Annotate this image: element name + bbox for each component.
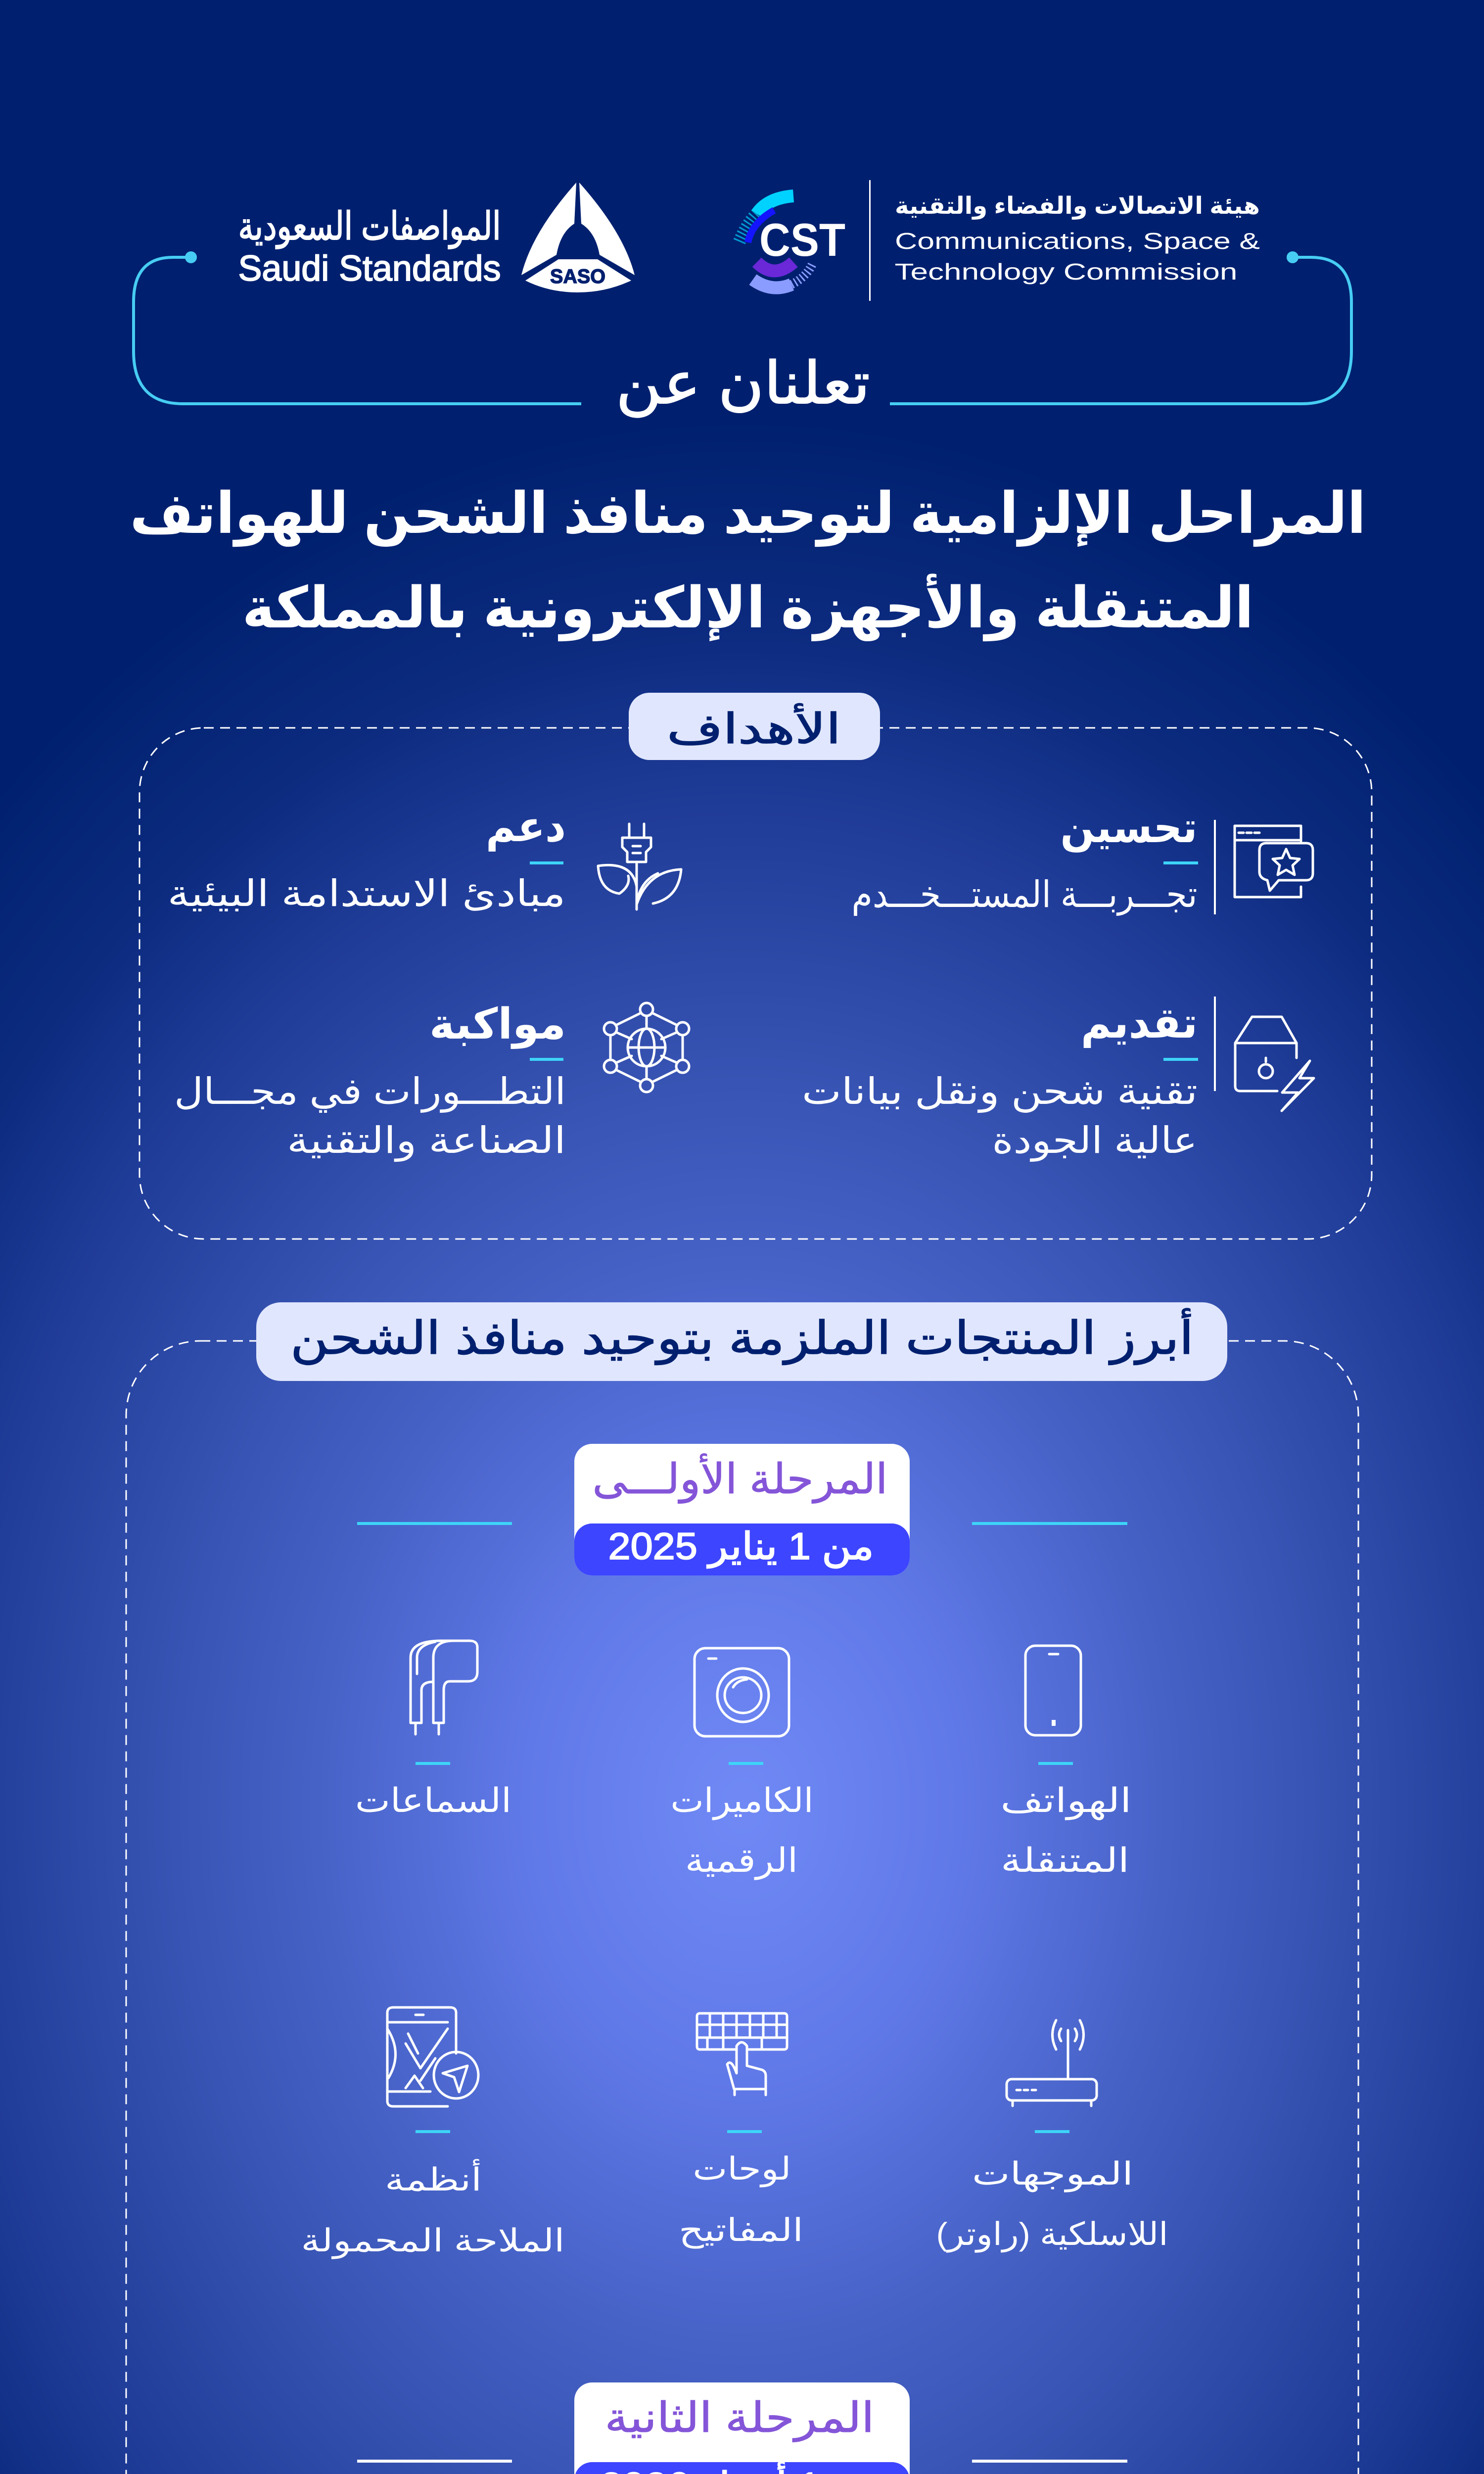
SASO name text: المواصفات السعودية xyxy=(238,204,501,249)
panel: goals xyxy=(139,693,1372,1239)
heading: products: أبرز المنتجات الملزمة بتوحيد منافذ الشحن xyxy=(290,1308,1194,1365)
subtitle: تعلنان عن xyxy=(616,351,870,418)
icon: charger with bolt xyxy=(1235,1017,1314,1111)
icon: navigation phone xyxy=(387,2007,478,2106)
goal: improve user experience: تجـــربـــة المستـــخـــدم xyxy=(852,874,1197,916)
goal: advanced charging xyxy=(802,997,1314,1162)
header frame line xyxy=(134,253,1351,404)
icon: camera xyxy=(695,1648,789,1736)
product: wireless routers: الموجهات xyxy=(972,2156,1133,2192)
product: portable navigation systems: الملاحة المحمولة xyxy=(301,2223,565,2259)
main title: المراحل الإلزامية لتوحيد منافذ الشحن للهواتف xyxy=(130,482,1366,547)
icon: router xyxy=(1007,2020,1097,2106)
phase 2 card: المرحلة الثانية xyxy=(604,2394,875,2442)
CST name text xyxy=(894,193,1260,285)
logo: CST: CST xyxy=(759,214,845,266)
icon: phone xyxy=(1025,1646,1081,1735)
goal: support sustainability: دعم xyxy=(486,803,566,852)
heading: goals xyxy=(629,693,880,760)
phase 1 card xyxy=(357,1444,1127,1575)
CST emblem xyxy=(739,196,812,288)
CST name text: Communications, Space & xyxy=(895,228,1260,254)
product: keyboards: لوحات xyxy=(693,2151,791,2188)
panel: products xyxy=(126,1302,1358,2474)
phase 1 card: المرحلة الأولـــى xyxy=(593,1453,887,1504)
CST name text: Technology Commission xyxy=(894,259,1238,285)
product: wireless routers: اللاسلكية (راوتر) xyxy=(936,2216,1168,2253)
heading: goals: الأهداف xyxy=(667,703,841,752)
goal: keeping pace with developments: الصناعة والتقنية xyxy=(287,1120,566,1162)
CST name text: هيئة الاتصالات والفضاء والتقنية xyxy=(895,193,1260,220)
main title: المتنقلة والأجهزة الإلكترونية بالمملكة xyxy=(242,573,1253,642)
main title xyxy=(130,482,1366,642)
product: earphones: السماعات xyxy=(355,1782,511,1819)
goal: keeping pace with developments: التطـــورات في مجـــال xyxy=(174,1071,566,1113)
icon: keyboard with finger xyxy=(697,2013,787,2095)
goal: improve user experience xyxy=(852,804,1313,916)
goal: advanced charging: عالية الجودة xyxy=(992,1120,1197,1162)
phase 1 card: من 1 يناير 2025 xyxy=(608,1525,874,1569)
product: earphones xyxy=(355,1641,511,1819)
product: portable navigation systems xyxy=(301,2007,565,2259)
SASO emblem xyxy=(521,183,635,292)
goal: keeping pace with developments xyxy=(174,1000,689,1162)
product: wireless routers xyxy=(936,2020,1168,2253)
product: keyboards: المفاتيح xyxy=(679,2212,803,2249)
logo: Saudi Standards xyxy=(238,183,635,292)
product: keyboards xyxy=(679,2013,803,2249)
product: mobile phones xyxy=(1000,1646,1132,1879)
SASO name text: Saudi Standards xyxy=(238,249,501,288)
goal: support sustainability xyxy=(167,803,681,914)
SASO name text xyxy=(238,204,501,288)
heading: products xyxy=(256,1302,1227,1381)
SASO emblem: SASO xyxy=(550,266,605,287)
phase 2 card xyxy=(357,2382,1127,2474)
product: mobile phones: المتنقلة xyxy=(1001,1842,1129,1879)
goal: keeping pace with developments: مواكبة xyxy=(429,1000,566,1049)
product: digital cameras: الرقمية xyxy=(685,1842,798,1880)
icon: plug plant xyxy=(598,824,681,909)
product: mobile phones: الهواتف xyxy=(1000,1782,1132,1820)
goal: support sustainability: مبادئ الاستدامة البيئية xyxy=(167,873,566,914)
icon: earphones xyxy=(411,1641,477,1734)
goal: advanced charging: تقنية شحن ونقل بيانات xyxy=(802,1071,1198,1113)
goal: improve user experience: تحسين xyxy=(1061,804,1197,853)
product: digital cameras xyxy=(671,1648,813,1880)
product: portable navigation systems: أنظمة xyxy=(385,2159,482,2197)
icon: window with rated chat xyxy=(1235,826,1313,897)
goal: advanced charging: تقديم xyxy=(1081,999,1198,1048)
logo: CST xyxy=(739,180,1260,301)
icon: globe network xyxy=(604,1003,689,1092)
product: digital cameras: الكاميرات xyxy=(671,1782,813,1820)
